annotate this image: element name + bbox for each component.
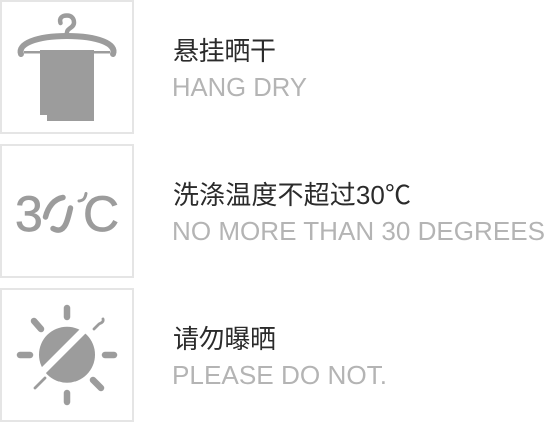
- icon box: hang dry: [1, 1, 133, 133]
- panel: hang dry: [1, 1, 307, 133]
- caption: no sun english: PLEASE DO NOT.: [172, 360, 387, 390]
- icon box: temperature: [1, 145, 133, 277]
- icon: 30 degrees: C: [83, 186, 119, 242]
- panel: no sun: [1, 289, 387, 421]
- panel: temperature: [1, 145, 545, 277]
- title: hang dry chinese: 悬挂晒干: [173, 36, 276, 66]
- icon box: no sun: [1, 289, 133, 421]
- icon: 30 degrees: [15, 186, 119, 242]
- title: no sun chinese: 请勿曝晒: [173, 324, 276, 354]
- icon: crossed sun: [20, 308, 114, 402]
- caption: hang dry english: HANG DRY: [172, 72, 307, 102]
- icon: 30 degrees: 3: [15, 186, 43, 242]
- icon: hanger with towel: [21, 16, 114, 121]
- caption: temperature english: NO MORE THAN 30 DEGREES: [172, 216, 545, 246]
- title: temperature chinese: 洗涤温度不超过30℃: [173, 180, 411, 210]
